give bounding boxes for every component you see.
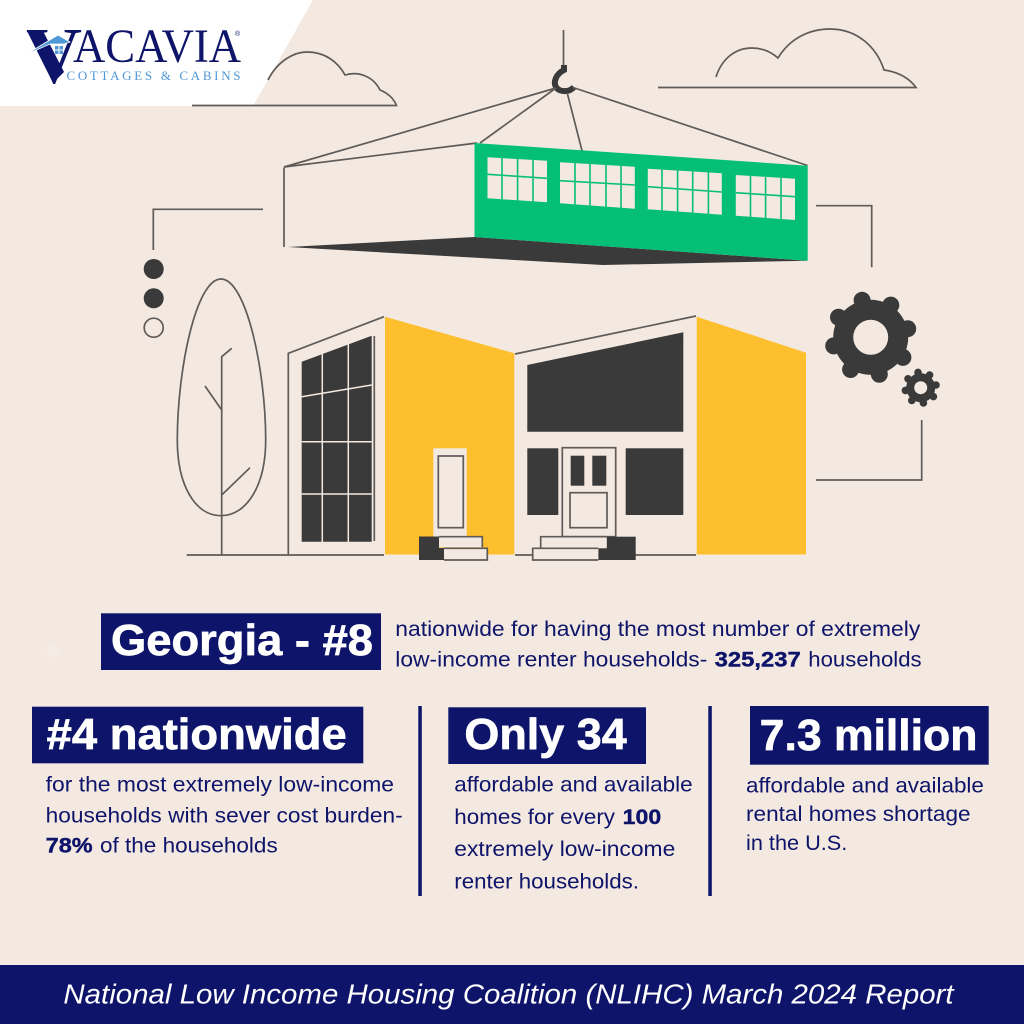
Georgia description: low-income renter households-: [395, 649, 707, 672]
footer bar: [0, 965, 1024, 1024]
window frame edge: [373, 336, 375, 541]
panel: Georgia ranking: [101, 613, 922, 672]
#4 description: 78%: [46, 834, 93, 857]
registered mark: ®: [235, 30, 241, 38]
illustration: house construction: [144, 29, 940, 560]
lifting cables: [284, 88, 808, 167]
ground line: [187, 554, 696, 556]
#4 description: of the households: [100, 834, 278, 857]
#4 description: households with sever cost burden-: [46, 804, 403, 827]
connector: top right: [816, 206, 872, 267]
window mullions: [302, 343, 372, 542]
logo wordmark: ACAVIA: [73, 20, 241, 73]
logo: Vacavia: [25, 13, 241, 101]
7.3 million description: in the U.S.: [746, 832, 847, 855]
left house door: [433, 448, 467, 538]
panel: 7.3 million: [746, 706, 989, 855]
Only 34 heading box: [448, 707, 646, 764]
Georgia heading box: [101, 613, 381, 670]
logo panel: [0, 0, 313, 106]
connector: bottom right: [816, 420, 922, 480]
left house: [288, 317, 514, 560]
left house steps: [419, 536, 487, 560]
Only 34 description: renter households.: [454, 870, 639, 893]
Only 34 heading: Only 34: [464, 710, 627, 759]
connector: top left: [153, 209, 263, 250]
7.3 million description: affordable and available: [746, 775, 984, 798]
footer: [0, 965, 1024, 1024]
7.3 million heading: 7.3 million: [760, 711, 977, 760]
Only 34 description: 100: [623, 806, 661, 829]
left house tall window: [302, 336, 372, 542]
tree: [177, 279, 266, 555]
module windows: [488, 157, 795, 220]
module shadow: [288, 237, 808, 265]
module left wall: [283, 168, 285, 247]
right house lower right window: [626, 448, 683, 515]
right house door: [562, 448, 616, 537]
Georgia description: nationwide for having the most number of extremely: [395, 618, 921, 641]
right house roof line: [515, 316, 696, 354]
panel: #4 nationwide: [32, 707, 403, 857]
icon: large gear: [825, 292, 916, 383]
logo tagline: COTTAGES & CABINS: [66, 68, 240, 83]
left cloud: [192, 52, 396, 106]
right cloud: [658, 29, 916, 88]
icon: house roof: [25, 35, 70, 55]
Georgia description: households: [808, 649, 922, 672]
Georgia heading: Georgia - #8: [111, 616, 373, 665]
#4 description: [46, 774, 403, 857]
7.3 million description: [746, 775, 984, 855]
crane hook: [555, 65, 574, 91]
left house wall outline: [288, 317, 384, 555]
panel: Only 34: [448, 707, 693, 893]
logo V thick arm: [27, 31, 64, 83]
#4 description: for the most extremely low-income: [46, 774, 394, 797]
progress dots: [144, 259, 164, 337]
#4 heading box: [32, 707, 363, 763]
right house upper window: [527, 332, 683, 432]
left house yellow wall: [385, 317, 514, 554]
right house lower left window: [527, 448, 558, 515]
crane rope: [562, 30, 564, 66]
footer source text: National Low Income Housing Coalition (NLIHC) March 2024 Report: [63, 978, 955, 1009]
Only 34 description: [454, 774, 693, 893]
Only 34 description: homes for every: [454, 806, 616, 829]
Only 34 description: affordable and available: [454, 774, 693, 797]
7.3 million description: rental homes shortage: [746, 803, 971, 826]
7.3 million heading box: [750, 706, 989, 765]
divider: [418, 706, 422, 896]
Georgia description: [395, 618, 922, 672]
divider: [708, 706, 712, 896]
logo wordmark initial: V: [26, 13, 82, 101]
Only 34 description: extremely low-income: [454, 838, 675, 861]
green module wall: [474, 143, 808, 261]
#4 heading: #4 nationwide: [47, 710, 347, 759]
Georgia description: 325,237: [715, 649, 801, 672]
right house: [515, 316, 806, 560]
right house steps: [533, 537, 636, 560]
right house yellow wall: [697, 317, 806, 554]
icon: small gear: [902, 369, 940, 407]
